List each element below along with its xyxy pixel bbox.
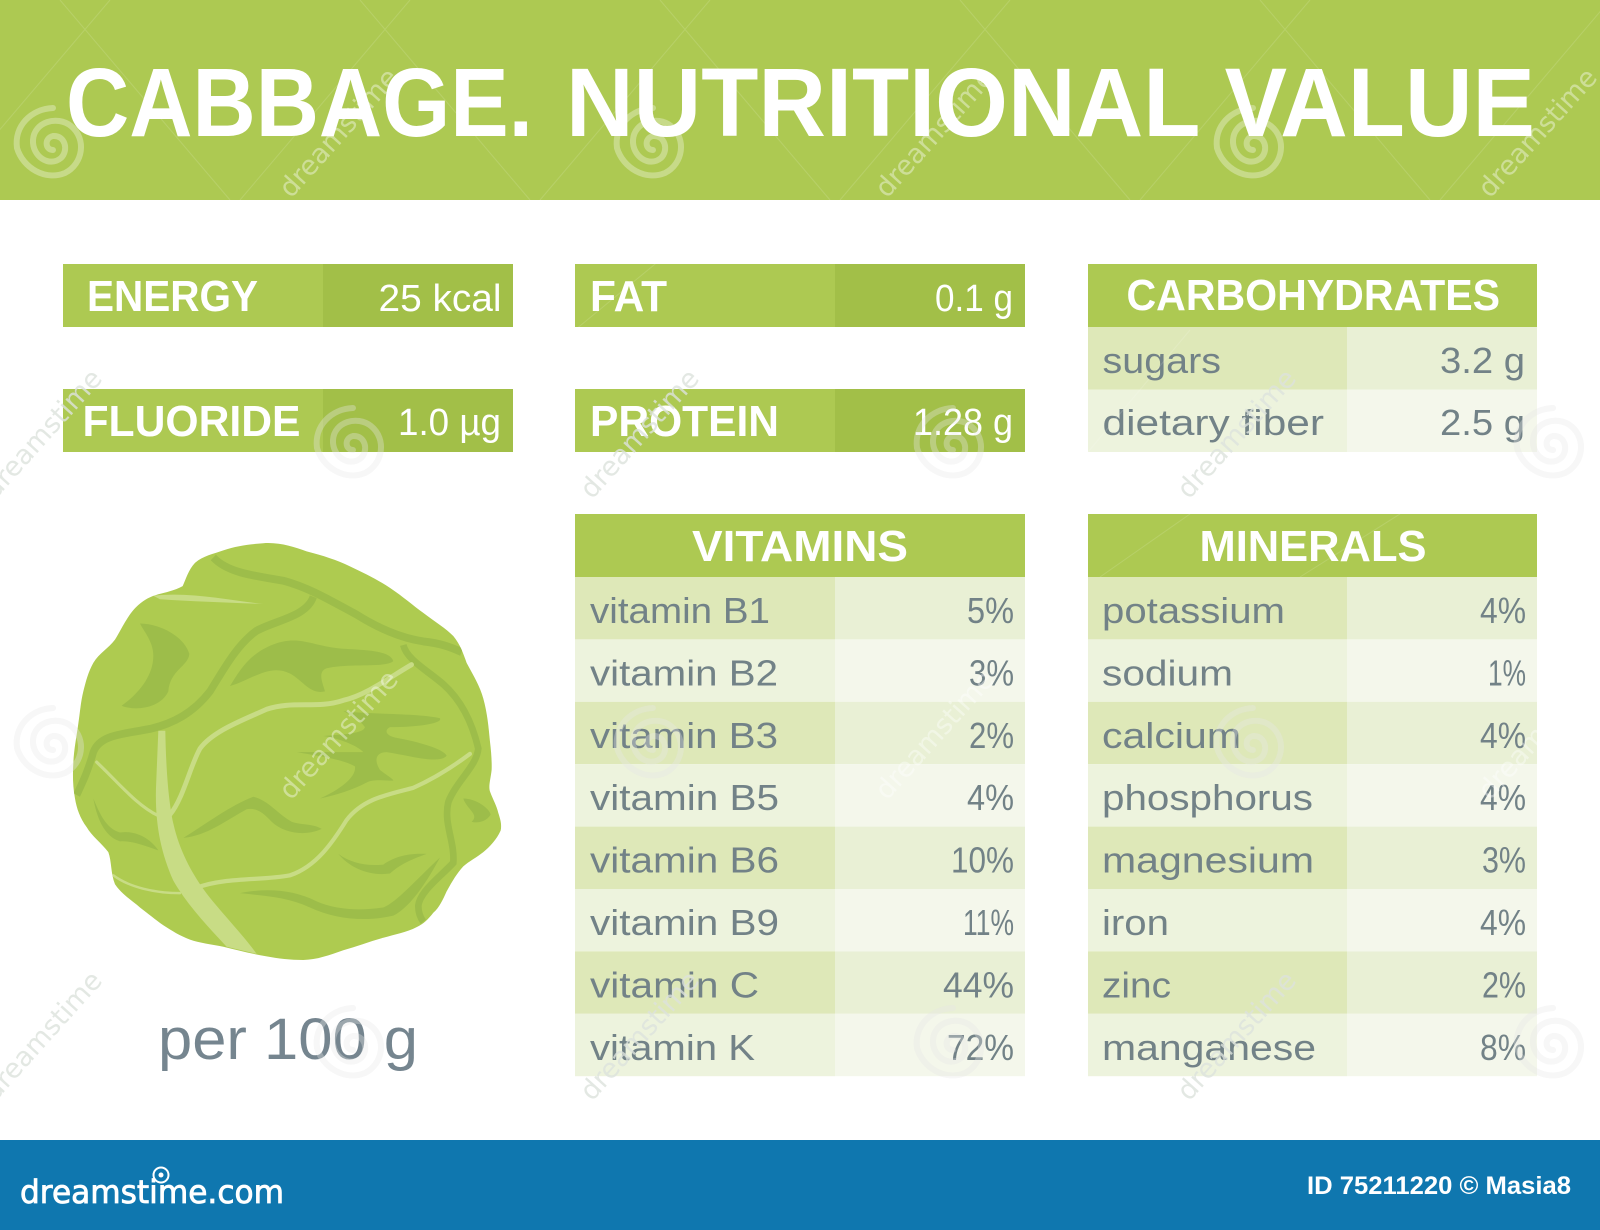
footer credit: ID 75211220 © Masia8 [1307,1172,1571,1200]
watermark text: dreamstime [273,664,405,806]
panel: carbohydrates: CARBOHYDRATES [1126,271,1500,320]
table: minerals: 8% [1480,1027,1526,1068]
label: per 100 g: per 100 g [158,1007,418,1072]
title: NUTRITIONAL VALUE [566,48,1535,157]
table: minerals: 3% [1482,840,1526,881]
table: vitamins: vitamin B9 [590,902,779,943]
table: vitamins: vitamin B3 [590,715,778,756]
table: minerals: zinc [1102,964,1171,1005]
panel: fat: FAT [590,272,667,321]
watermark text: dreamstime [1472,62,1600,204]
panel: energy: ENERGY [87,272,258,321]
panel: fat: 0.1 g [935,278,1013,320]
panel: fluoride [63,389,513,452]
footer bar [0,1140,1600,1230]
table: vitamins: vitamin B2 [590,652,778,693]
table: vitamins: vitamin K [590,1027,755,1068]
panel: carbohydrates: dietary fiber [1102,402,1324,443]
table: minerals: 1% [1488,652,1526,693]
table: minerals: 4% [1480,902,1526,943]
table: vitamins: 4% [967,777,1014,818]
table: minerals: 4% [1480,777,1526,818]
table: minerals: manganese [1102,1027,1316,1068]
panel: fluoride: 1.0 µg [398,402,501,444]
table: minerals: magnesium [1102,840,1314,881]
table: vitamins: vitamin B5 [590,777,779,818]
panel: protein: PROTEIN [590,397,779,446]
table: minerals: MINERALS [1200,522,1426,571]
panel: carbohydrates: 2.5 g [1440,402,1525,443]
watermark text: dreamstime [869,62,1001,204]
panel: fat [575,264,1025,327]
table: vitamins: vitamin B1 [590,590,770,631]
table: minerals: iron [1102,902,1169,943]
table: minerals: potassium [1102,590,1285,631]
table: vitamins: 3% [969,652,1014,693]
watermark text: dreamstime [869,664,1001,806]
panel: carbohydrates: sugars [1102,340,1221,381]
table: minerals [1088,514,1537,1076]
table: vitamins: 10% [951,840,1014,881]
table: vitamins: 72% [947,1027,1014,1068]
panel: carbohydrates: 3.2 g [1440,340,1525,381]
table: minerals: phosphorus [1102,777,1313,818]
watermark text: dreamstime [574,363,706,505]
table: vitamins: vitamin C [590,964,759,1005]
panel: protein [575,389,1025,452]
panel: carbohydrates [1088,264,1537,452]
watermark text: dreamstime [1171,363,1303,505]
watermark spirals [17,108,1581,1075]
footer logo: dreamstime.com [20,1173,284,1211]
header banner [0,0,1600,200]
watermark text: dreamstime [1472,664,1600,806]
watermark text: dreamstime [273,62,405,204]
watermark text: dreamstime [1171,965,1303,1107]
title: CABBAGE. [66,48,533,157]
table: minerals: 2% [1482,964,1526,1005]
table: vitamins: 2% [969,715,1014,756]
table: minerals: calcium [1102,715,1241,756]
panel: fluoride: FLUORIDE [82,397,300,446]
table: vitamins: 44% [943,964,1014,1005]
panel: protein: 1.28 g [913,402,1013,444]
table: minerals: 4% [1480,590,1526,631]
watermark text: dreamstime [574,965,706,1107]
table: minerals: sodium [1102,652,1233,693]
table: vitamins: 11% [963,902,1014,943]
table: vitamins: 5% [967,590,1014,631]
table: vitamins: vitamin B6 [590,840,779,881]
cabbage dark veins [77,557,491,922]
cabbage light ribs [97,595,470,954]
table: vitamins [575,514,1025,1076]
panel: energy [63,264,513,327]
icon: cabbage [72,543,502,960]
table: vitamins: VITAMINS [692,522,908,571]
panel: energy: 25 kcal [378,278,502,320]
table: minerals: 4% [1480,715,1526,756]
